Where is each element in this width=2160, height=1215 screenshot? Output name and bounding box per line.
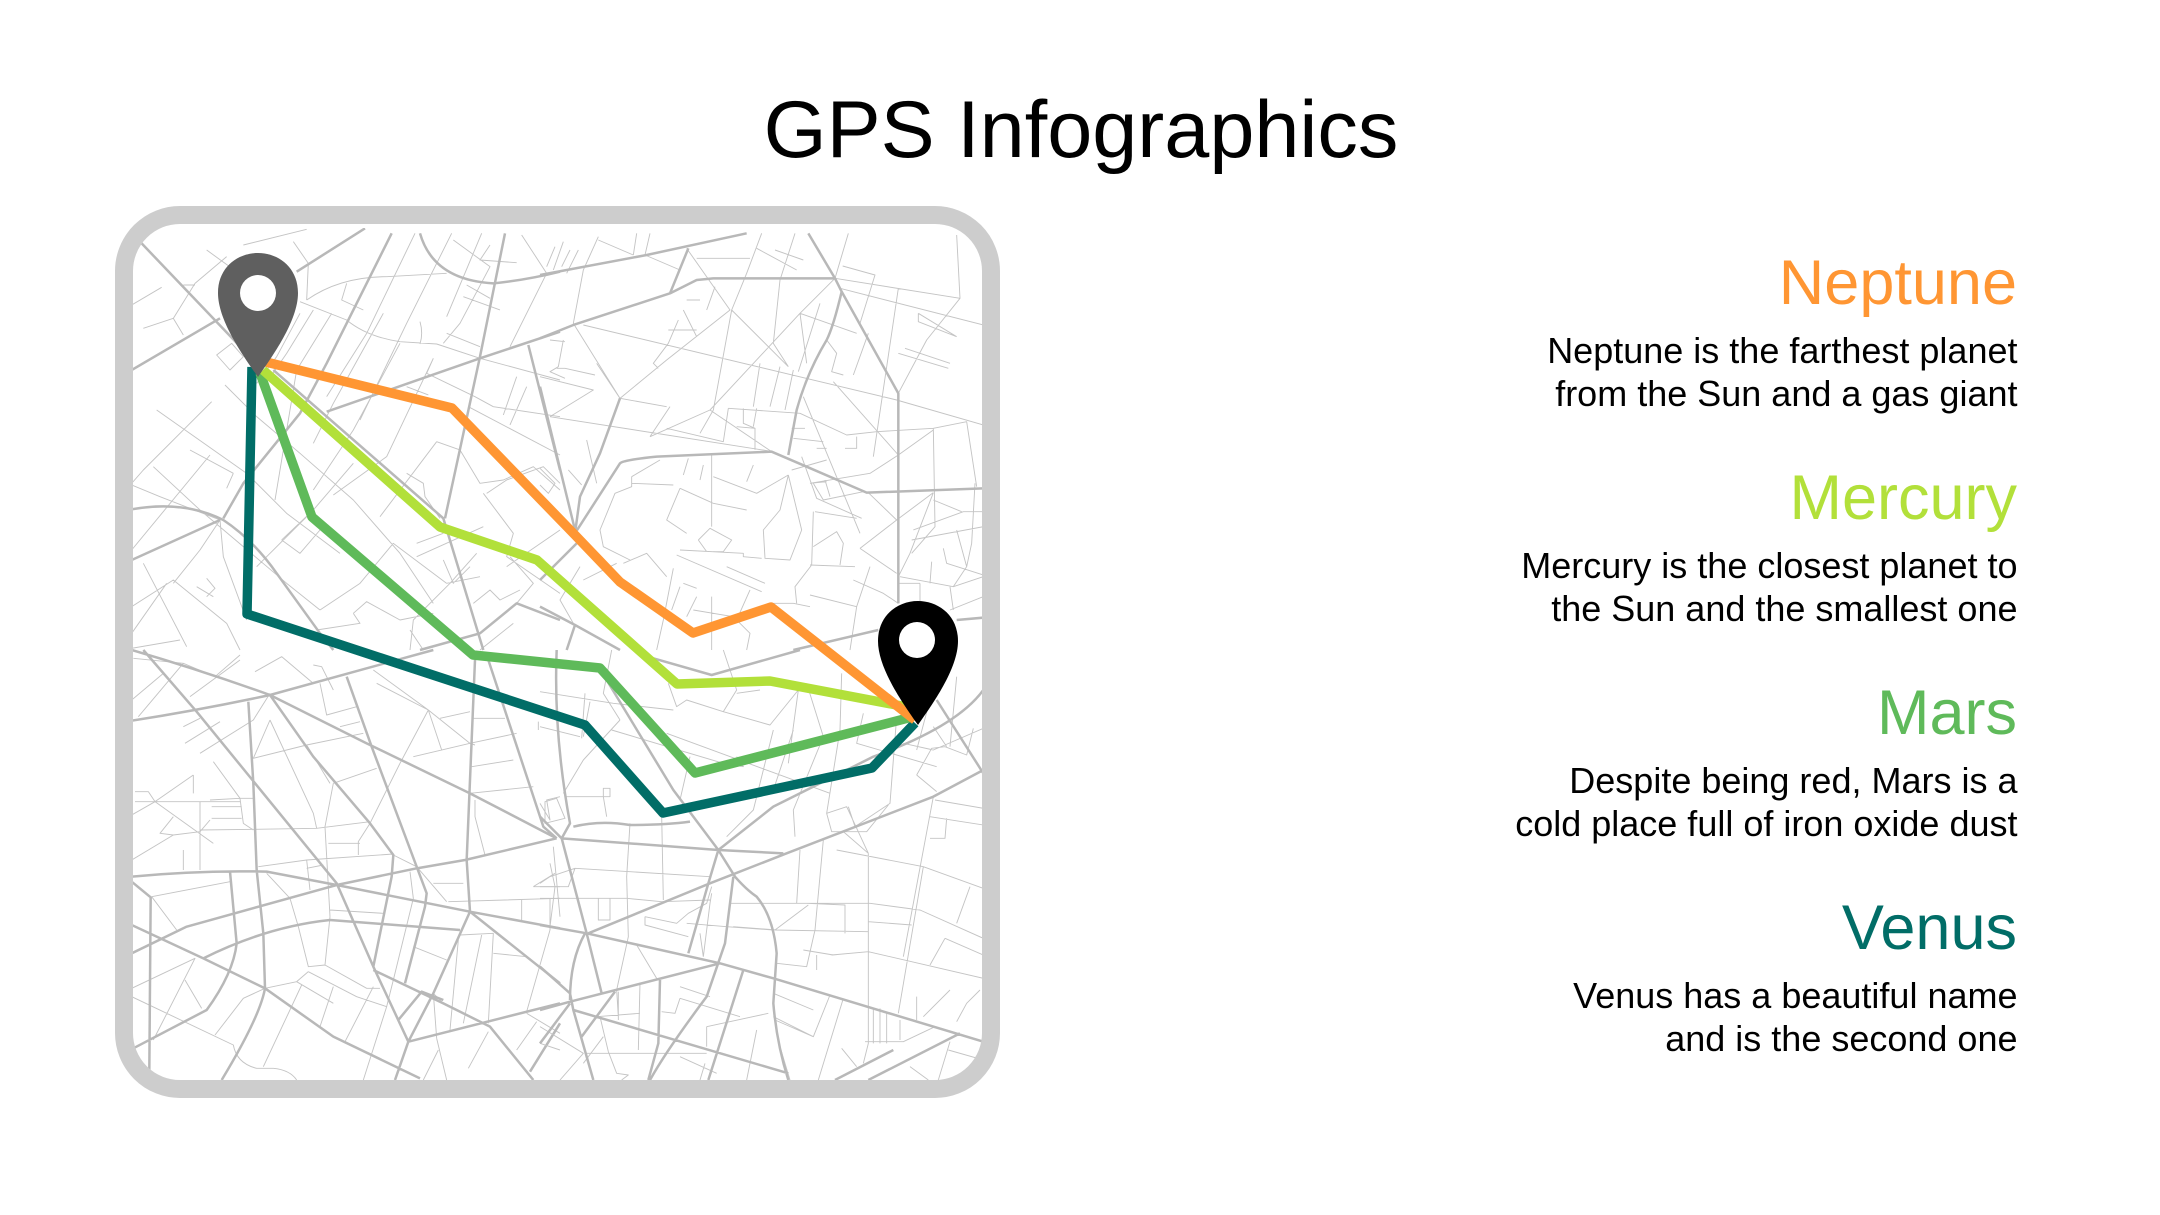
legend: Mars: Mars xyxy=(1877,678,2017,748)
legend: Venus: and is the second one xyxy=(1665,1018,2018,1059)
legend: Neptune xyxy=(1547,248,2018,414)
legend: Neptune: Neptune is the farthest planet xyxy=(1547,330,2018,371)
route: Mercury xyxy=(263,370,907,707)
title: GPS Infographics xyxy=(764,85,1398,175)
panel: map xyxy=(124,215,991,1089)
icon: end pin xyxy=(878,601,958,725)
legend: Mars xyxy=(1515,678,2018,844)
legend: Mercury: the Sun and the smallest one xyxy=(1551,588,2018,629)
legend: Mercury xyxy=(1521,463,2018,629)
route: Neptune xyxy=(266,362,915,720)
map frame xyxy=(124,215,991,1089)
legend: Neptune: from the Sun and a gas giant xyxy=(1555,373,2018,414)
legend: Mercury: Mercury xyxy=(1789,463,2017,533)
legend: Mars: Despite being red, Mars is a xyxy=(1569,760,2018,801)
legend: Neptune: Neptune xyxy=(1779,248,2017,318)
route: Mars xyxy=(260,373,912,773)
legend: Mars: cold place full of iron oxide dust xyxy=(1515,803,2018,844)
street map xyxy=(132,228,983,1080)
legend: Venus: Venus xyxy=(1842,893,2017,963)
route: Venus xyxy=(247,367,915,813)
legend: Mercury: Mercury is the closest planet to xyxy=(1521,545,2018,586)
legend: Venus: Venus has a beautiful name xyxy=(1573,975,2018,1016)
legend: Venus xyxy=(1573,893,2018,1059)
icon: start pin xyxy=(218,253,298,377)
